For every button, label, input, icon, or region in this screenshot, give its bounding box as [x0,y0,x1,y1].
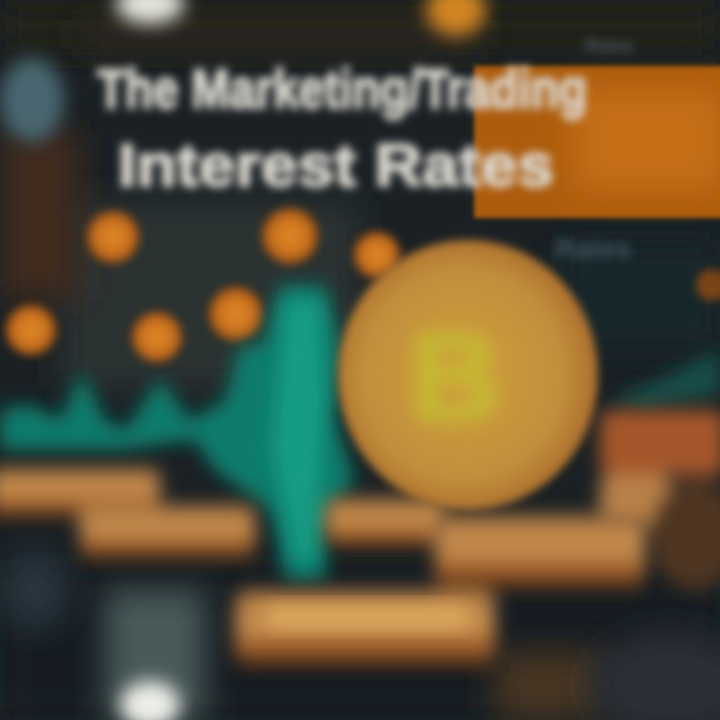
title: Interest Rates [118,132,554,199]
top lights [0,0,486,142]
small label right of coin: Rates [555,233,631,264]
gold bars, front row [235,515,645,668]
teal waveform chart [0,285,355,580]
title: The Marketing/Trading [97,57,587,120]
gold coin [338,240,598,510]
panel: orange header block [474,66,720,218]
bottom white glow [120,681,180,720]
bright teal core [272,300,325,560]
coin symbol: B [410,308,500,447]
small label on orange panel: Rates [585,36,634,56]
title [97,57,587,199]
orange panel highlight [575,90,720,190]
orange orbs [5,207,720,363]
front bar highlight [265,605,470,629]
gold bars, back row [0,410,720,590]
right teal line [610,350,720,410]
